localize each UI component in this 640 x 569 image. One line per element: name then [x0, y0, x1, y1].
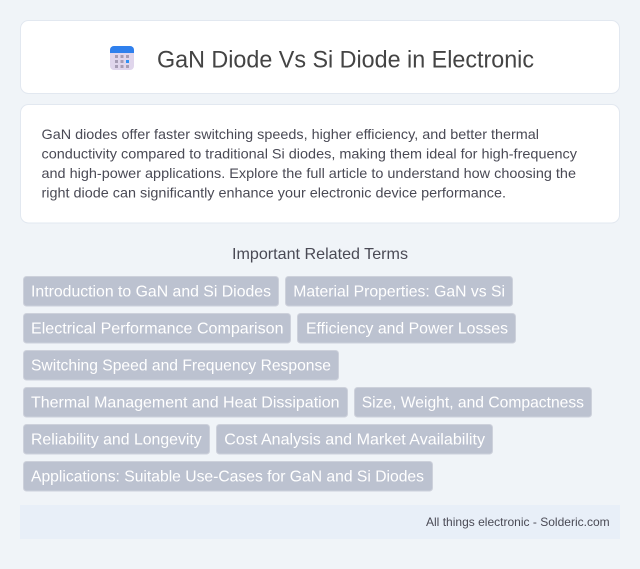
summary text: GaN diodes offer faster switching speeds, higher efficiency, and better thermal	[42, 126, 539, 142]
summary text: right diode can significantly enhance your electronic device performance.	[42, 184, 506, 200]
heading: important related terms: Important Related Terms	[232, 246, 408, 263]
tag: Size, Weight, and Compactness	[362, 395, 584, 412]
tag: Applications: Suitable Use-Cases for GaN and Si Diodes	[31, 469, 424, 486]
tag	[24, 388, 348, 417]
tag	[24, 424, 210, 454]
title: GaN Diode Vs Si Diode in Electronic	[157, 46, 534, 74]
tag: Switching Speed and Frequency Response	[31, 358, 331, 375]
tag	[24, 276, 278, 306]
panel: summary	[20, 104, 620, 223]
tag: Cost Analysis and Market Availability	[224, 432, 485, 449]
tag	[298, 314, 516, 343]
tag	[354, 388, 592, 417]
tag	[24, 462, 432, 491]
footer credit: All things electronic - Solderic.com	[426, 515, 610, 529]
tag: Material Properties: GaN vs Si	[293, 284, 505, 301]
summary text	[42, 126, 577, 200]
summary text: and high-power applications. Explore the full article to understand how choosing the	[42, 165, 576, 181]
tag	[216, 424, 492, 454]
icon: calendar	[110, 46, 134, 70]
panel: related terms tags	[24, 276, 592, 491]
summary text: conductivity compared to traditional Si diodes, making them ideal for high-frequency	[42, 146, 577, 162]
tag	[24, 350, 338, 380]
tag	[24, 314, 290, 343]
tag: Reliability and Longevity	[31, 432, 202, 449]
tag: Efficiency and Power Losses	[306, 321, 508, 338]
tag: Thermal Management and Heat Dissipation	[31, 395, 340, 412]
tag	[286, 276, 512, 306]
tag: Electrical Performance Comparison	[31, 321, 284, 338]
tag: Introduction to GaN and Si Diodes	[31, 284, 271, 301]
panel: footer	[20, 505, 620, 539]
panel: title header	[20, 20, 620, 94]
